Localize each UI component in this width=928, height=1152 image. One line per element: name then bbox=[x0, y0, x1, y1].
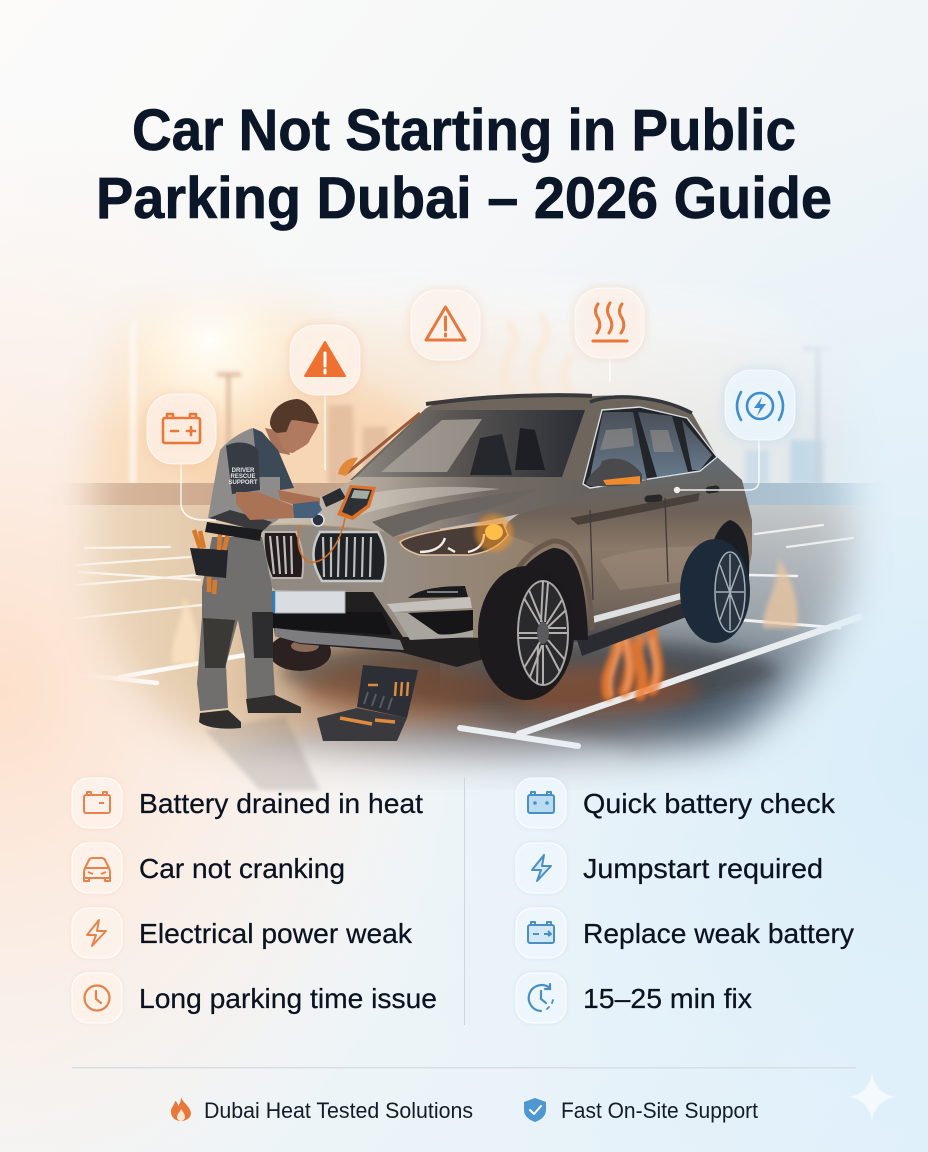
sleeve text: RESCUE bbox=[230, 474, 256, 480]
lower grille bbox=[273, 612, 392, 635]
hood bbox=[267, 477, 600, 537]
item: battery drained bbox=[72, 778, 423, 828]
parking lot backdrop bbox=[67, 294, 872, 782]
title: Parking Dubai – 2026 Guide bbox=[96, 166, 832, 231]
sleeve text: DRIVER bbox=[232, 468, 255, 474]
floating badge: outline warning bbox=[411, 290, 480, 360]
headlight bbox=[400, 514, 513, 555]
front fascia bbox=[264, 525, 535, 640]
side skirt chrome bbox=[590, 590, 693, 623]
windshield bbox=[356, 410, 585, 477]
logo badge bbox=[312, 514, 324, 526]
item: battery drained: Battery drained in heat bbox=[139, 788, 423, 819]
far arm bbox=[278, 490, 320, 504]
rear wheel bbox=[680, 539, 750, 643]
title: Car Not Starting in Public bbox=[132, 98, 796, 163]
sleeve text bbox=[228, 468, 258, 486]
torso bbox=[208, 428, 294, 530]
waist and belt bbox=[209, 510, 272, 532]
parking bay lines bbox=[77, 525, 860, 746]
item: car not cranking bbox=[72, 843, 345, 893]
blue glove bbox=[293, 501, 322, 518]
shirt sleeve bbox=[226, 443, 260, 494]
rear wheel arch bbox=[703, 520, 749, 600]
item: car not cranking: Car not cranking bbox=[139, 853, 345, 884]
item: jumpstart required bbox=[516, 843, 823, 893]
front wheel arch bbox=[494, 548, 588, 640]
neck bbox=[265, 428, 290, 455]
head bbox=[270, 399, 319, 453]
list: solutions bbox=[516, 778, 854, 1023]
item: quick battery check: Quick battery check bbox=[583, 788, 836, 819]
dark glove bbox=[322, 488, 346, 507]
footer rule bbox=[72, 1067, 856, 1068]
floor reflection bbox=[205, 716, 320, 790]
heat flames on asphalt bbox=[172, 557, 798, 695]
item: replace weak battery bbox=[516, 908, 854, 958]
item: replace weak battery: Replace weak battery bbox=[583, 918, 854, 949]
hero illustration: parking scene bbox=[67, 283, 872, 792]
kidney grille right bbox=[313, 532, 386, 581]
floating badge: filled warning bbox=[290, 325, 360, 395]
list: problems bbox=[72, 778, 437, 1023]
footer: heat tested: Dubai Heat Tested Solutions bbox=[204, 1098, 473, 1123]
roof bbox=[350, 396, 717, 488]
divider between lists bbox=[464, 777, 465, 1025]
silver lip bbox=[275, 628, 404, 650]
side reflections bbox=[570, 493, 710, 600]
front wheel bbox=[478, 566, 574, 700]
item: long parking time bbox=[72, 973, 437, 1023]
boots bbox=[199, 710, 241, 729]
item: long parking time: Long parking time issue bbox=[139, 983, 437, 1014]
side windows bbox=[583, 407, 717, 488]
sill bbox=[577, 597, 705, 656]
item: quick battery check bbox=[516, 778, 836, 828]
item: electrical power weak: Electrical power weak bbox=[139, 918, 413, 949]
side panels bbox=[493, 457, 752, 642]
footer: on-site support: Fast On-Site Support bbox=[561, 1098, 758, 1123]
item: electrical power weak bbox=[72, 908, 413, 958]
floating badge: electric waves bbox=[725, 370, 795, 440]
car bbox=[264, 395, 752, 700]
licence plate bbox=[272, 591, 345, 613]
decorative sparkle bbox=[848, 1072, 896, 1121]
sleeve text: SUPPORT bbox=[228, 480, 258, 486]
dark bumper surround bbox=[273, 592, 497, 667]
side mirror bbox=[586, 459, 642, 486]
toolbox bbox=[317, 665, 418, 741]
connector lines bbox=[181, 358, 759, 520]
floating badge: heat bbox=[575, 288, 644, 358]
kidney grille left bbox=[264, 532, 303, 578]
item: jumpstart required: Jumpstart required bbox=[583, 853, 823, 884]
item: 15–25 min fix: 15–25 min fix bbox=[583, 983, 752, 1014]
far front wheel bbox=[269, 633, 331, 671]
item: 15–25 min fix bbox=[516, 973, 752, 1023]
technician bbox=[190, 399, 376, 790]
tool pouch bbox=[190, 548, 228, 578]
amber side marker bbox=[338, 458, 358, 476]
heat waves above car bbox=[505, 318, 570, 392]
title bbox=[96, 98, 832, 231]
door handles bbox=[648, 489, 716, 499]
floating badge: battery bbox=[147, 394, 216, 464]
trousers bbox=[197, 537, 275, 711]
near arm bbox=[236, 492, 294, 520]
multimeter bbox=[298, 485, 376, 562]
fog lamp and chrome trim bbox=[387, 586, 473, 640]
